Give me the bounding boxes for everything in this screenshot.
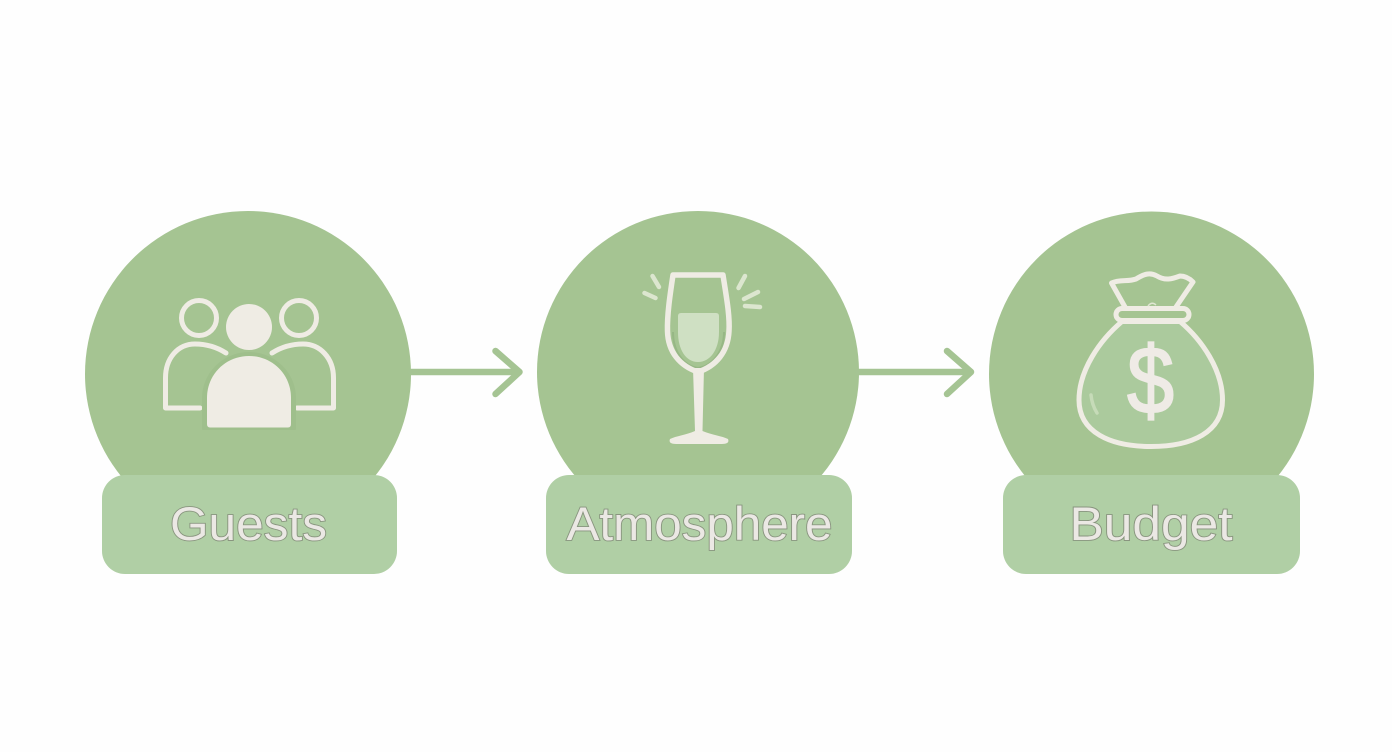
label: Budget: Budget	[1070, 497, 1232, 550]
arrow: atmosphere to budget	[859, 351, 971, 394]
dollar sign: $	[1127, 327, 1174, 434]
label: Atmosphere: Atmosphere	[566, 497, 832, 550]
highlight	[1091, 395, 1097, 413]
panel: budget	[989, 212, 1314, 574]
icon: group of people	[166, 300, 334, 430]
label: Budget	[1003, 475, 1300, 574]
label: Guests	[102, 475, 397, 574]
label: Atmosphere	[546, 475, 852, 574]
circle: atmosphere	[537, 211, 859, 533]
bag neck	[1116, 308, 1189, 320]
arrow: guests to atmosphere	[411, 351, 520, 394]
circle: budget	[989, 212, 1314, 536]
panel: atmosphere	[537, 211, 859, 574]
bag body	[1079, 322, 1222, 446]
wine fill	[678, 313, 719, 362]
icon: wine glass	[644, 275, 760, 444]
circle: guests	[85, 211, 411, 537]
bag top frill	[1112, 274, 1193, 307]
glass outline	[667, 275, 729, 372]
label: Guests: Guests	[170, 497, 327, 550]
glass inner shadow	[673, 332, 724, 368]
panel: guests	[85, 211, 411, 574]
sparkle lines	[644, 276, 760, 307]
icon: money bag	[1079, 274, 1222, 446]
glass stem and base	[670, 368, 728, 444]
tie mark	[1148, 303, 1156, 306]
